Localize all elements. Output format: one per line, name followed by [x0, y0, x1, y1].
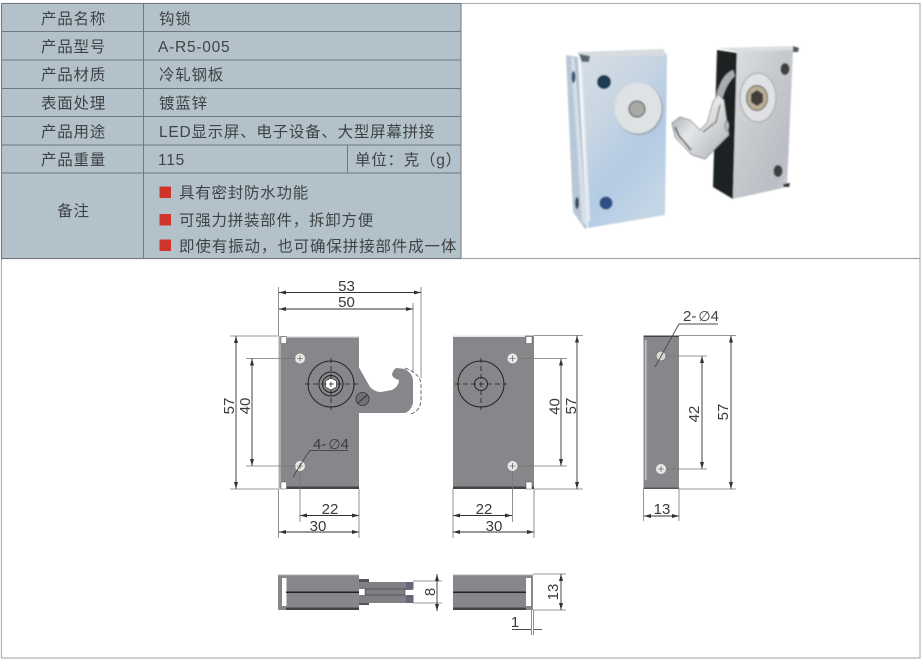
hook swing dashed outline — [405, 368, 421, 414]
remark 3: 即使有振动，也可确保拼接部件成一体 — [179, 238, 457, 256]
drawing: back view — [453, 336, 583, 538]
dimension lines — [644, 324, 736, 521]
row: model: A-R5-005 — [158, 39, 230, 56]
row: surface treatment — [41, 94, 208, 112]
remark 1: 具有密封防水功能 — [179, 184, 309, 202]
row: surface treatment: 镀蓝锌 — [159, 94, 208, 112]
row: product name — [41, 10, 192, 28]
body — [278, 574, 359, 610]
row: surface treatment: 表面处理 — [41, 94, 106, 112]
mounting holes — [295, 354, 305, 471]
dimension labels: 53 — [338, 278, 355, 295]
body — [453, 574, 533, 610]
row: usage — [41, 123, 435, 141]
dimension labels: 40 — [546, 398, 564, 415]
row: material: 产品材质 — [41, 66, 106, 84]
dimension labels — [476, 398, 580, 535]
row: usage: LED显示屏、电子设备、大型屏幕拼接 — [159, 123, 435, 141]
right latch body and hook — [672, 46, 799, 199]
dimension labels: 57 — [715, 404, 732, 420]
dimension labels — [221, 278, 355, 535]
dimension labels: 50 — [338, 294, 355, 311]
dimension labels: 13 — [654, 501, 670, 518]
right latch holes — [780, 63, 790, 75]
hub outline — [455, 358, 507, 410]
dimension labels: 42 — [686, 406, 703, 422]
mounting holes — [508, 354, 518, 471]
dimension lines — [230, 287, 421, 538]
remark 2: 可强力拼装部件，拆卸方便 — [179, 212, 374, 230]
row: weight: 115 — [158, 152, 185, 169]
hook outline — [359, 368, 413, 413]
dimension 8 — [413, 574, 442, 611]
drawing: front view — [221, 278, 421, 538]
side plate — [644, 336, 679, 489]
body plate — [278, 336, 359, 489]
row: remarks label: 备注 — [57, 202, 90, 220]
dimension labels: 30 — [486, 518, 502, 535]
row: material — [41, 66, 224, 84]
product photo: two hook latch parts — [566, 46, 799, 229]
row: weight: 产品重量 — [41, 151, 106, 169]
dimension 8: 8 — [422, 588, 439, 596]
hook blade — [672, 94, 729, 159]
row: material: 冷轧钢板 — [159, 66, 224, 84]
dimension labels: 57 — [563, 398, 580, 414]
dimension labels — [654, 308, 732, 518]
drawing: bottom view left — [278, 574, 442, 611]
dimension labels: 4-∅4 — [313, 436, 349, 453]
row: usage: 产品用途 — [41, 123, 106, 141]
dimension labels: 40 — [237, 398, 254, 414]
hub with hex socket — [305, 358, 358, 410]
drawing: bottom view right — [453, 574, 566, 635]
screw — [356, 392, 369, 406]
row: model — [41, 38, 230, 56]
drawing: side view — [644, 308, 736, 521]
dimension lines — [453, 336, 583, 538]
dimension 13: 13 — [545, 584, 562, 600]
hook end — [359, 579, 414, 605]
hook arm — [712, 70, 735, 118]
row: product name: 钩锁 — [159, 10, 192, 28]
row: model: 产品型号 — [41, 38, 106, 56]
body plate — [453, 336, 534, 489]
dimension labels: 22 — [476, 501, 492, 518]
row: weight — [41, 151, 462, 169]
row: weight: 单位：克（g） — [355, 151, 462, 169]
side holes — [656, 351, 666, 474]
dimension labels: 57 — [221, 398, 238, 414]
dimension 1: 1 — [511, 614, 519, 631]
left latch body — [566, 49, 667, 229]
right latch hub — [740, 73, 776, 122]
row: product name: 产品名称 — [41, 10, 106, 28]
dimension labels: 30 — [310, 518, 326, 535]
dimension labels: 22 — [322, 501, 338, 518]
dimension labels: 2-∅4 — [683, 308, 719, 325]
panel: specification table — [2, 4, 462, 258]
